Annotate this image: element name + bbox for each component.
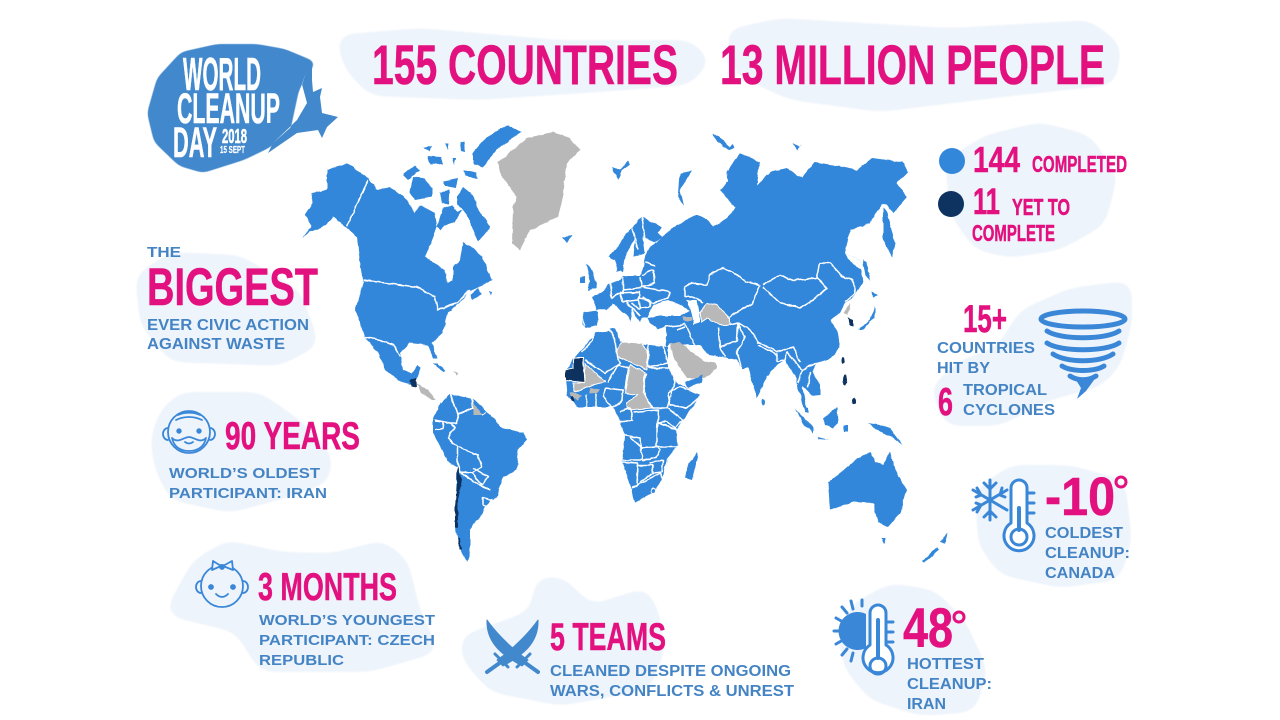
callout: 3 months youngest participant: WORLD’S YOUNGEST [259,612,435,629]
logo: World Cleanup Day: DAY [173,119,217,167]
callout: tropical cyclones: COUNTRIES [937,340,1035,357]
callout: 3 months youngest participant [258,566,435,669]
map: Australia and New Zealand [828,452,948,563]
icon: crossed swords [487,620,538,672]
callout: 90 years oldest participant: 90 YEARS [225,415,360,458]
callout: 48 degrees hottest cleanup: 48 [903,596,953,659]
callout: -10 degrees coldest cleanup [1045,467,1130,582]
icon: baby face [196,561,248,607]
callout: -10 degrees coldest cleanup: CANADA [1045,565,1115,582]
callout: -10 degrees coldest cleanup: COLDEST [1045,525,1123,542]
legend: completed vs yet to complete: COMPLETED [1032,151,1127,177]
icon: snowflake and thermometer [973,480,1034,551]
legend: completed vs yet to complete: 11 [973,181,1000,222]
legend: completed vs yet to complete: YET TO [1012,194,1070,220]
callout: tropical cyclones: 6 [938,381,953,424]
callout: tropical cyclones [937,298,1055,424]
logo: World Cleanup Day: CLEANUP [177,85,280,133]
callout: 3 months youngest participant: 3 MONTHS [258,566,397,609]
logo: World Cleanup Day: 15 SEPT [220,145,245,156]
map: Eurasia [582,153,908,412]
map: Africa [565,328,702,503]
map: North America [303,125,572,385]
legend: completed vs yet to complete: 144 [973,139,1020,180]
logo: World Cleanup Day: WORLD [183,48,261,100]
callout: 48 degrees hottest cleanup: HOTTEST [907,656,984,673]
map: Scandinavia and UK [580,217,663,291]
map: Arctic Russia islands [612,133,895,280]
callout: 5 teams: WARS, CONFLICTS & UNREST [550,683,795,700]
callout: 5 teams: 5 TEAMS [550,616,666,659]
callout: the biggest: BIGGEST [147,258,318,317]
icon: old man face [163,411,215,453]
callout: 48 degrees hottest cleanup [903,596,992,713]
world map [303,125,948,563]
heading: 155 countries: 155 COUNTRIES [372,33,678,96]
map: Arabia and Yemen [670,342,717,388]
legend: completed vs yet to complete: COMPLETE [972,220,1055,246]
map: Korea and Japan [843,292,878,330]
callout: the biggest [147,244,318,353]
callout: tropical cyclones: HIT BY [937,360,990,377]
icon: tornado [1041,311,1125,399]
callout: the biggest: AGAINST WASTE [147,336,285,353]
callout: tropical cyclones: TROPICAL [963,382,1047,399]
callout: the biggest: THE [147,244,181,261]
map: Madagascar [685,452,698,480]
callout: -10 degrees coldest cleanup: -10 [1045,467,1115,527]
heading: 13 million people: 13 MILLION PEOPLE [720,33,1105,96]
map: South America [433,393,527,562]
icon: sun and thermometer [834,600,893,674]
callout: 5 teams [550,616,795,700]
callout: 3 months youngest participant: PARTICIPANT: CZECH [259,632,435,649]
map: Philippines [842,356,856,404]
callout: 48 degrees hottest cleanup: IRAN [907,696,946,713]
map: Central America and Caribbean [410,364,458,400]
map: Greenland [498,132,580,250]
callout: 90 years oldest participant: PARTICIPANT: IRAN [169,485,327,502]
callout: -10 degrees coldest cleanup: CLEANUP: [1045,545,1130,562]
callout: tropical cyclones: CYCLONES [963,402,1055,419]
map: Southeast Asia islands [761,399,903,445]
callout: 90 years oldest participant [169,415,360,502]
callout: 5 teams: CLEANED DESPITE ONGOING [550,663,791,680]
legend: completed vs yet to complete [938,139,1127,246]
callout: the biggest: EVER CIVIC ACTION [147,317,309,334]
logo: World Cleanup Day [147,44,338,173]
logo: World Cleanup Day: 2018 [222,126,247,148]
callout: 90 years oldest participant: WORLD’S OLDEST [169,465,320,482]
callout: tropical cyclones: 15+ [963,298,1007,341]
callout: 48 degrees hottest cleanup: CLEANUP: [907,676,992,693]
callout: 3 months youngest participant: REPUBLIC [259,652,344,669]
background blobs [135,18,1132,716]
